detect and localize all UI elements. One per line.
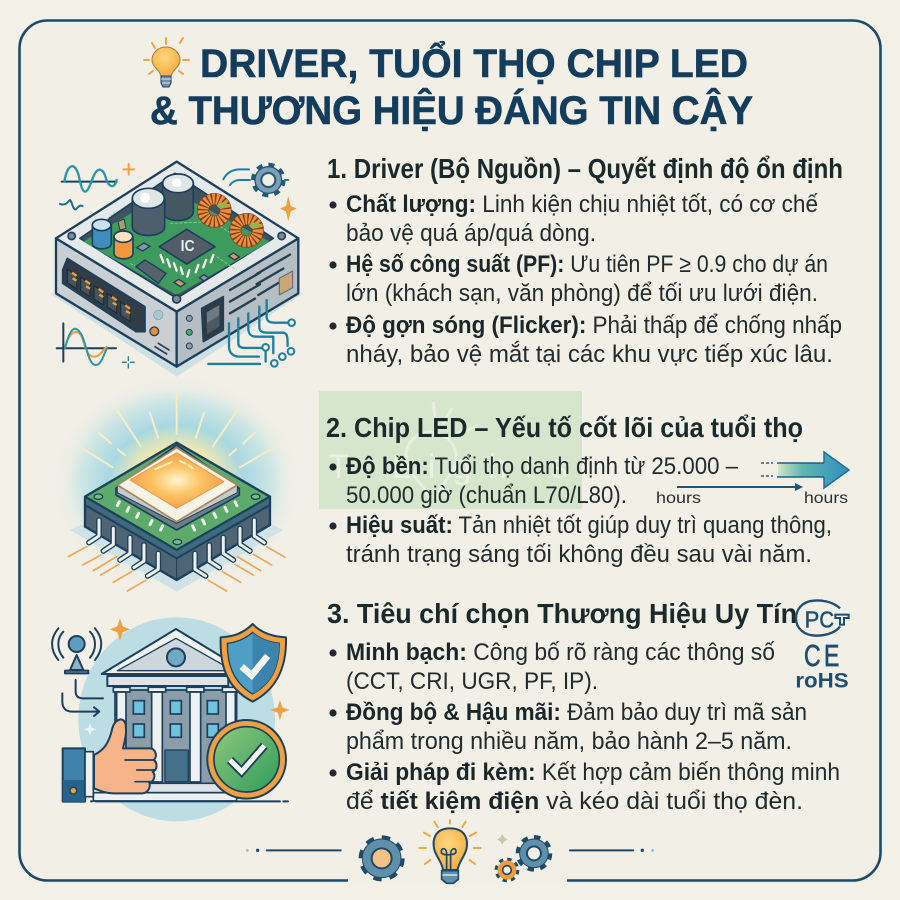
gear large right: [519, 838, 549, 869]
windows: [133, 701, 218, 737]
columns: [113, 687, 238, 782]
sparkle: [122, 357, 134, 368]
bullet: hệ số công suất: [329, 251, 828, 307]
gear left: [362, 838, 402, 878]
bullet: minh bạch: [329, 639, 775, 695]
rays: [79, 392, 275, 467]
inner small pins: [117, 502, 237, 530]
small components: [136, 243, 239, 287]
icon: certification marks: E: [824, 639, 839, 673]
bullet: độ gợn sóng: [329, 312, 842, 368]
star orange: [280, 196, 297, 221]
bottom decoration: [246, 820, 654, 883]
indicators left face: [154, 310, 163, 320]
building body: [115, 690, 237, 783]
panel: brand text: [327, 598, 840, 815]
bullet: độ bền: [329, 453, 739, 509]
bullet: minh bạch: Minh bạch: Công bố rõ ràng các thông số: [346, 639, 775, 666]
illustration: glowing LED chip: [53, 377, 300, 592]
thumbs up hand: [63, 719, 157, 802]
led dots right face: [186, 315, 192, 349]
LED emitter: [130, 453, 224, 508]
metal pins: [89, 520, 264, 576]
icon: certification marks: C: [804, 639, 821, 673]
bullet: đồng bộ: [329, 699, 807, 755]
bullet: độ gợn sóng: Độ gợn sóng (Flicker): Phải thấp để chống nhấp: [346, 312, 842, 339]
pediment: [102, 629, 243, 674]
bullet: độ bền: Độ bền: Tuổi thọ danh định từ 25.000 –: [346, 453, 739, 480]
icon: certification marks: C: [819, 607, 834, 633]
bullet: chất lượng: [329, 191, 819, 247]
bullet: hiệu suất: Hiệu suất: Tản nhiệt tốt giúp duy trì quang thông,: [346, 512, 832, 539]
gear: [223, 165, 288, 195]
star top: [110, 618, 130, 640]
sine wave top-left: [60, 166, 117, 209]
capacitors: [92, 174, 193, 259]
bullet: giải pháp: Giải pháp đi kèm: Kết hợp cảm biến thông minh: [346, 759, 840, 786]
vents: [230, 255, 290, 313]
bullet: hiệu suất: tránh trạng sáng tối không đều sau vài năm.: [346, 541, 812, 568]
bullet: hiệu suất: [329, 512, 832, 568]
toroid coils: [203, 199, 259, 242]
bullet: đồng bộ: phẩm trong nhiều năm, bảo hành 2–5 năm.: [346, 728, 792, 755]
glow: [53, 377, 300, 590]
bullet: minh bạch: (CCT, CRI, UGR, PF, IP).: [346, 668, 598, 695]
arrow: lifetime hours: hours: [804, 490, 848, 507]
left face: [56, 238, 177, 367]
antenna: [52, 628, 101, 673]
bullet: đồng bộ: Đồng bộ & Hậu mãi: Đảm bảo duy trì mã sản: [346, 699, 807, 726]
check badge: [207, 720, 286, 799]
title: & THƯƠNG HIỆU ĐÁNG TIN CẬY: [150, 87, 753, 133]
bullet: độ bền: 50.000 giờ (chuẩn L70/L80).: [346, 482, 627, 509]
panel: chip text: [326, 412, 832, 568]
circuit traces: [208, 300, 295, 367]
rule right: [570, 847, 633, 853]
steps: [108, 783, 227, 793]
right face: [177, 238, 298, 367]
shield: [221, 624, 286, 702]
watermark: T Lights: [328, 448, 568, 486]
entablature: [107, 676, 228, 686]
arrow: lifetime hours: hours: [656, 490, 701, 507]
connector right: [279, 271, 293, 295]
signal arrows: [62, 680, 103, 716]
bullet: độ gợn sóng: nháy, bảo vệ mắt tại các khu vực tiếp xúc lâu.: [346, 341, 833, 368]
icon: certification marks: roHS: [795, 669, 849, 693]
plus orange: [123, 164, 134, 175]
illustration: trusted brand building: [52, 617, 290, 821]
star right: [270, 700, 290, 720]
panel: driver text: [327, 153, 843, 368]
watermark: [319, 391, 582, 509]
shadow: [50, 293, 303, 377]
arrow: lifetime hours: [656, 452, 849, 507]
inner wall: [80, 173, 273, 298]
icon: certification marks: [795, 600, 849, 693]
rule left: [267, 847, 341, 853]
terminal block: [63, 258, 145, 332]
rocker switch: [202, 297, 223, 342]
LED housing: [116, 445, 239, 530]
sparkle: [497, 834, 508, 845]
bullet: hệ số công suất: lớn (khách sạn, văn phòng) để tối ưu lưới điện.: [346, 280, 818, 307]
bullet: hệ số công suất: Hệ số công suất (PF): Ưu tiên PF ≥ 0.9 cho dự án: [346, 251, 828, 278]
bullet: chất lượng: bảo vệ quá áp/quá dòng.: [346, 220, 596, 247]
heading: chip: 2. Chip LED – Yếu tố cốt lõi của tuổi thọ: [326, 412, 803, 443]
top rim: [56, 162, 298, 312]
dots: [246, 849, 654, 852]
sparkle: [84, 723, 96, 735]
icon: certification marks: P: [805, 607, 819, 633]
backdrop: [78, 617, 275, 821]
sine wave bottom-left: [57, 323, 116, 365]
IC chip: [159, 229, 215, 277]
chip body: [85, 498, 270, 580]
bullet: chất lượng: Chất lượng: Linh kiện chịu nhiệt tốt, có cơ chế: [346, 191, 819, 218]
gear small right: [497, 860, 517, 880]
icon: title light bulb: [144, 38, 189, 87]
bullet: giải pháp: [329, 759, 840, 815]
orange leads: [68, 547, 285, 591]
title: [150, 39, 753, 133]
screws: [68, 232, 285, 303]
heading: brand: 3. Tiêu chí chọn Thương Hiệu Uy Tín: [327, 598, 797, 629]
green board: [85, 443, 270, 550]
title: DRIVER, TUỔI THỌ CHIP LED: [200, 39, 748, 86]
bullet: giải pháp: để tiết kiệm điện và kéo dài tuổi thọ đèn.: [346, 788, 803, 815]
door: [165, 750, 188, 782]
floor shadow: [70, 480, 283, 592]
pcb: [83, 190, 270, 295]
IC chip: IC: [181, 238, 195, 255]
baseline: [91, 798, 288, 804]
bulb: [419, 820, 481, 883]
illustration: LED driver box: [50, 162, 303, 377]
